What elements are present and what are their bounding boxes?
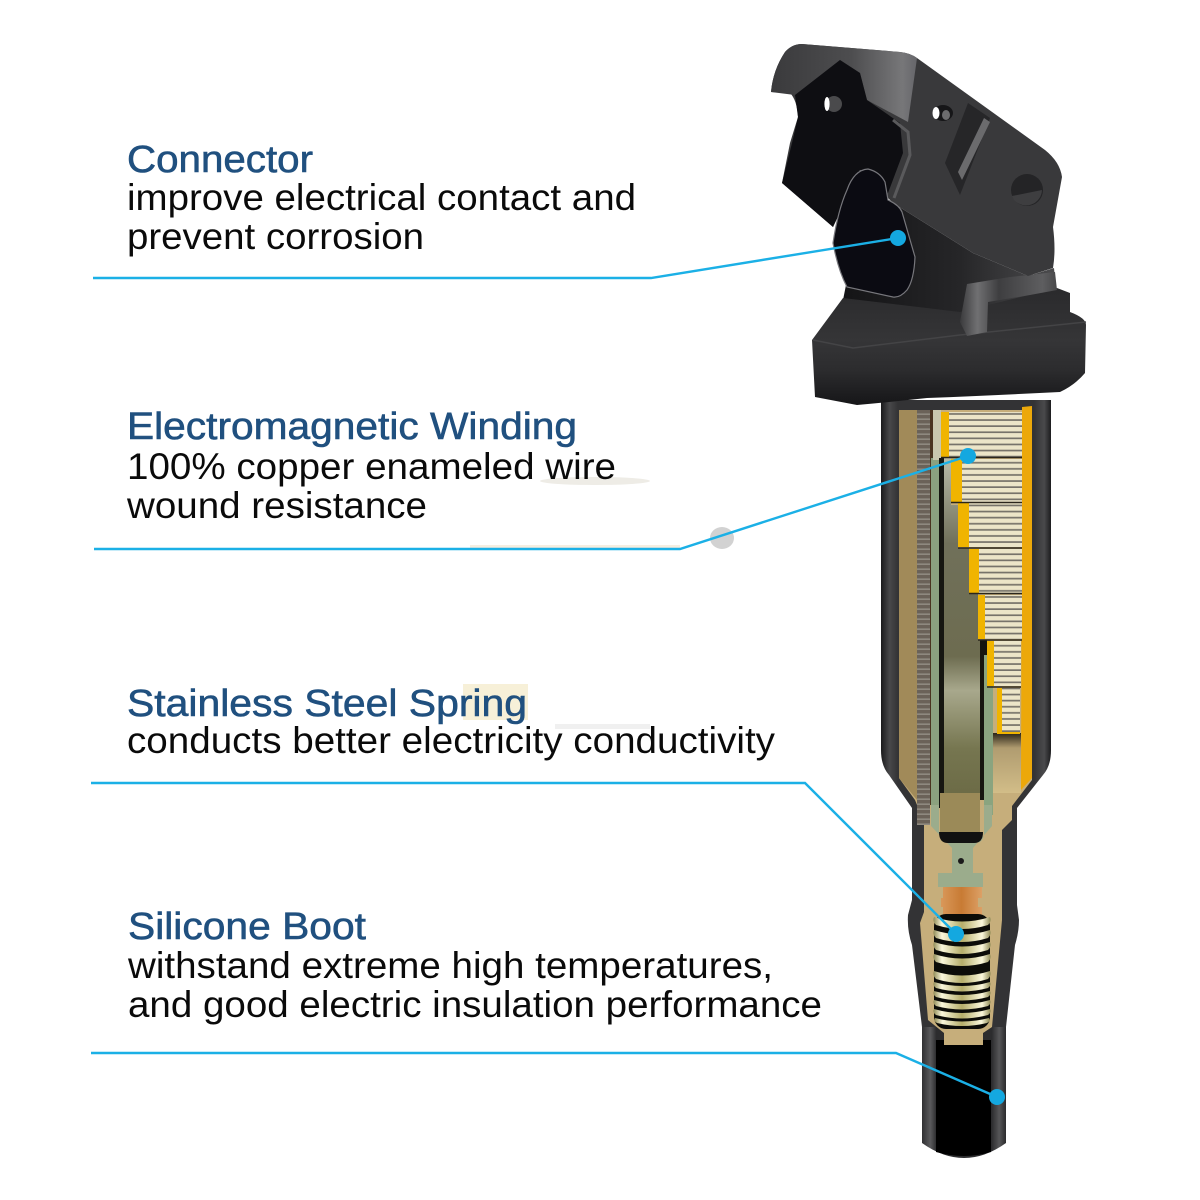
hole left [824,96,842,112]
faint background artifacts [463,477,734,729]
cup black base [939,832,983,843]
brown band and green tube [930,410,933,805]
collar [812,288,1086,405]
right orange casing [1021,406,1032,790]
cutaway interior [899,406,1032,1045]
leader: boot [91,1053,1005,1105]
black sleeve [939,458,945,808]
label: electromagnetic winding: 100% copper enameled wire [127,446,616,487]
core end block [940,793,980,833]
label: connector: Connector [127,139,313,181]
winding sections [941,412,1022,734]
label: silicone boot: Silicone Boot [128,906,366,948]
boot inner bore [936,1040,991,1156]
label: electromagnetic winding: wound resistance [126,485,427,526]
label: silicone boot: withstand extreme high temperatures, [127,945,773,986]
label: stainless steel spring: Stainless Steel Spring [127,683,527,725]
spring [933,914,991,1029]
label: silicone boot: and good electric insulation performance [128,984,822,1025]
inner black strip [980,640,987,800]
mounting hole [1011,174,1043,206]
label: connector [127,139,636,257]
terminal cup and stem [931,805,992,887]
left tan band [899,410,917,800]
lower boot tube [922,1027,1006,1158]
leader: connector [93,230,906,278]
stacked grid strip [917,410,930,825]
label: stainless steel spring [127,683,776,761]
cut-out rim highlight [893,120,910,198]
inner green tube [984,655,993,815]
coil shell [881,400,1051,1158]
stem hole [958,858,964,864]
main body [771,44,1062,276]
upper housing fill [899,410,1032,1045]
collar edge highlight [813,322,1086,348]
top face highlight [771,44,917,122]
connector head [771,44,1086,405]
label: connector: improve electrical contact and [127,177,636,218]
label: silicone boot [127,906,822,1025]
label: stainless steel spring: conducts better electricity conductivity [127,720,776,761]
light tan cavity [993,733,1021,793]
leader: spring [91,783,964,942]
label: electromagnetic winding: Electromagnetic Winding [127,406,577,448]
slot rib [945,103,990,195]
hole middle [932,105,953,121]
leader: winding [94,448,976,549]
connector socket [833,169,915,297]
dark cut-out [782,60,903,227]
ferrite core [944,458,980,800]
collar tab [960,272,1057,336]
neck [843,203,1057,330]
label: connector: prevent corrosion [127,216,424,257]
label: electromagnetic winding [126,406,616,526]
copper contact [941,887,982,918]
